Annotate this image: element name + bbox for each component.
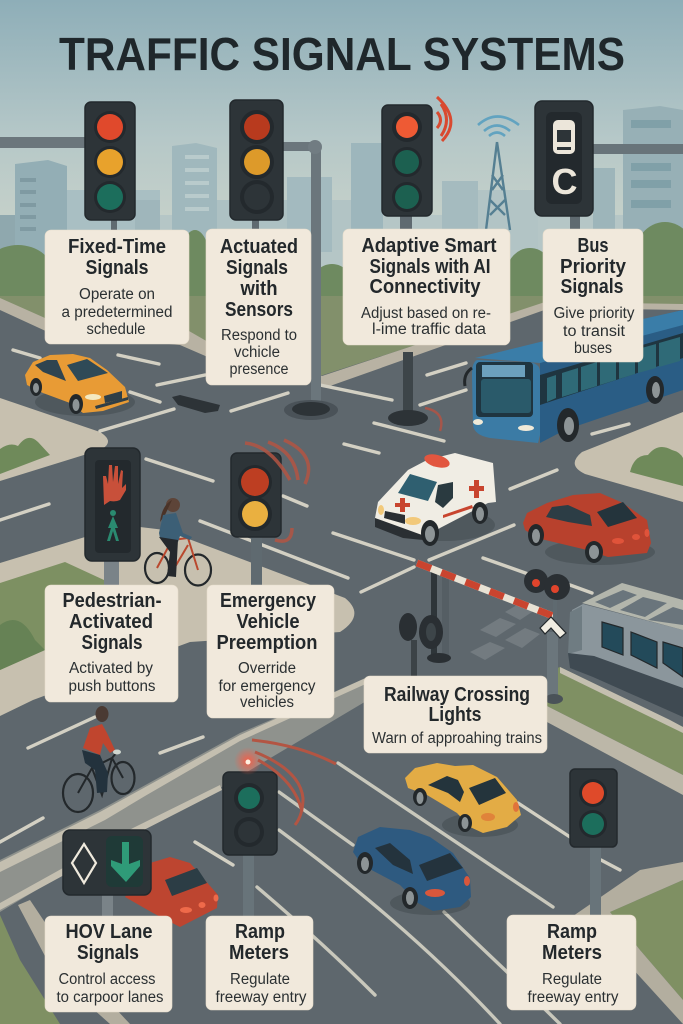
card: emergency vehicle preemption: vehicles xyxy=(240,694,294,711)
dark road sensor xyxy=(172,395,220,413)
card: ramp meters centre: Ramp xyxy=(235,920,285,943)
car: red right xyxy=(523,493,655,565)
card: fixed-time signals xyxy=(45,230,189,344)
trees xyxy=(0,222,683,312)
card: pedestrian-activated signals: Signals xyxy=(82,631,142,654)
lower right grass and kerbs xyxy=(547,667,683,1024)
card: adaptive smart signals xyxy=(343,229,510,345)
card: adaptive smart signals: l-ime traffic data xyxy=(372,321,486,338)
card: adaptive smart signals: Signals with AI xyxy=(370,255,490,278)
card: HOV lane signals: Control access xyxy=(58,971,156,988)
card: ramp meters centre: Meters xyxy=(229,941,289,964)
ambulance xyxy=(375,452,496,546)
car: red under HOV sign xyxy=(125,857,218,927)
card: pedestrian-activated signals: push buttons xyxy=(68,678,156,695)
card: actuated signals: Signals xyxy=(226,256,288,279)
title: TRAFFIC SIGNAL SYSTEMS xyxy=(59,28,625,80)
signal: bus priority: C xyxy=(552,161,578,202)
card: railway crossing lights: Warn of approahing trains xyxy=(372,730,542,747)
card: ramp meters right: freeway entry xyxy=(528,989,619,1006)
card: bus priority signals: Signals xyxy=(560,275,624,298)
card: emergency vehicle preemption: Override xyxy=(238,660,296,677)
ground and roadway xyxy=(0,298,683,1024)
central sidewalk and grass xyxy=(0,527,354,716)
card: actuated signals: Sensors xyxy=(225,298,293,321)
card: bus priority signals: buses xyxy=(574,340,612,357)
bus xyxy=(465,310,683,443)
upper grass and kerbs xyxy=(0,296,683,386)
car: yellow xyxy=(405,763,521,837)
card: pedestrian-activated signals: Activated xyxy=(69,610,153,633)
card: bus priority signals: Priority xyxy=(560,255,627,278)
card: HOV lane signals: to carpoor lanes xyxy=(56,989,164,1006)
card: ramp meters right xyxy=(507,915,636,1010)
diagonal sidewalk band xyxy=(0,676,370,912)
card: pedestrian-activated signals: Pedestrian- xyxy=(62,589,162,612)
card: ramp meters right: Meters xyxy=(542,941,602,964)
card: ramp meters right: Regulate xyxy=(542,971,602,988)
signal: ramp meter centre xyxy=(223,740,336,917)
card: fixed-time signals: Operate on xyxy=(79,286,155,303)
signal: bus priority xyxy=(535,101,683,230)
card: emergency vehicle preemption xyxy=(207,585,334,718)
sky background xyxy=(0,0,683,310)
card: HOV lane signals: HOV Lane xyxy=(66,920,152,943)
signal: pedestrian xyxy=(85,448,140,586)
card: fixed-time signals: Signals xyxy=(86,256,148,279)
card: railway crossing lights: Railway Crossing xyxy=(384,683,530,706)
card: actuated signals: vchicle xyxy=(234,344,280,361)
card: pedestrian-activated signals: Activated by xyxy=(69,660,153,677)
card: adaptive smart signals: Adaptive Smart xyxy=(362,234,497,257)
card: railway crossing lights xyxy=(364,676,547,753)
card: railway crossing lights: Lights xyxy=(428,703,482,726)
card: HOV lane signals: Signals xyxy=(77,941,139,964)
signal: actuated with pole xyxy=(230,100,338,420)
card: bus priority signals: Give priority xyxy=(554,305,635,322)
car: blue xyxy=(353,827,471,915)
signal: adaptive smart xyxy=(382,97,451,431)
card: HOV lane signals xyxy=(45,916,172,1012)
card: fixed-time signals: a predetermined xyxy=(62,304,172,321)
wifi tower xyxy=(478,116,519,230)
card: emergency vehicle preemption: for emergency xyxy=(218,678,316,695)
sidewalk corners with bushes xyxy=(0,398,683,502)
road markings xyxy=(0,350,629,1024)
card: fixed-time signals: schedule xyxy=(86,321,146,338)
card: ramp meters centre: freeway entry xyxy=(216,989,307,1006)
card: actuated signals: Actuated xyxy=(220,235,298,258)
signal: emergency preemption xyxy=(231,440,309,587)
train xyxy=(568,583,683,717)
card: actuated signals: presence xyxy=(230,361,288,378)
card: ramp meters centre: Regulate xyxy=(230,971,290,988)
card: ramp meters centre xyxy=(206,916,313,1010)
cyclist: woman xyxy=(145,498,211,586)
card: actuated signals xyxy=(206,229,311,385)
signal: ramp meter right xyxy=(570,769,617,917)
card: ramp meters right: Ramp xyxy=(547,920,597,943)
card: fixed-time signals: Fixed-Time xyxy=(68,235,166,258)
card: emergency vehicle preemption: Preemption xyxy=(216,631,318,654)
rail crossing paving xyxy=(470,602,540,660)
railway crossing gate xyxy=(399,563,570,704)
card: adaptive smart signals: Adjust based on re- xyxy=(361,305,491,322)
card: bus priority signals xyxy=(543,229,643,362)
card: bus priority signals: Bus xyxy=(578,234,608,257)
card: emergency vehicle preemption: Vehicle xyxy=(236,610,300,633)
card: actuated signals: Respond to xyxy=(221,327,297,344)
card: pedestrian-activated signals xyxy=(45,585,178,702)
card: adaptive smart signals: Connectivity xyxy=(370,275,481,298)
signal: HOV lane xyxy=(63,830,151,917)
lower left grass xyxy=(0,900,130,1024)
card: actuated signals: with xyxy=(240,277,278,300)
city skyline xyxy=(0,106,683,285)
card: bus priority signals: to transit xyxy=(563,323,626,340)
card: emergency vehicle preemption: Emergency xyxy=(220,589,317,612)
car: orange xyxy=(25,354,135,416)
signal: fixed-time xyxy=(0,102,135,232)
cyclist: man xyxy=(63,706,134,812)
